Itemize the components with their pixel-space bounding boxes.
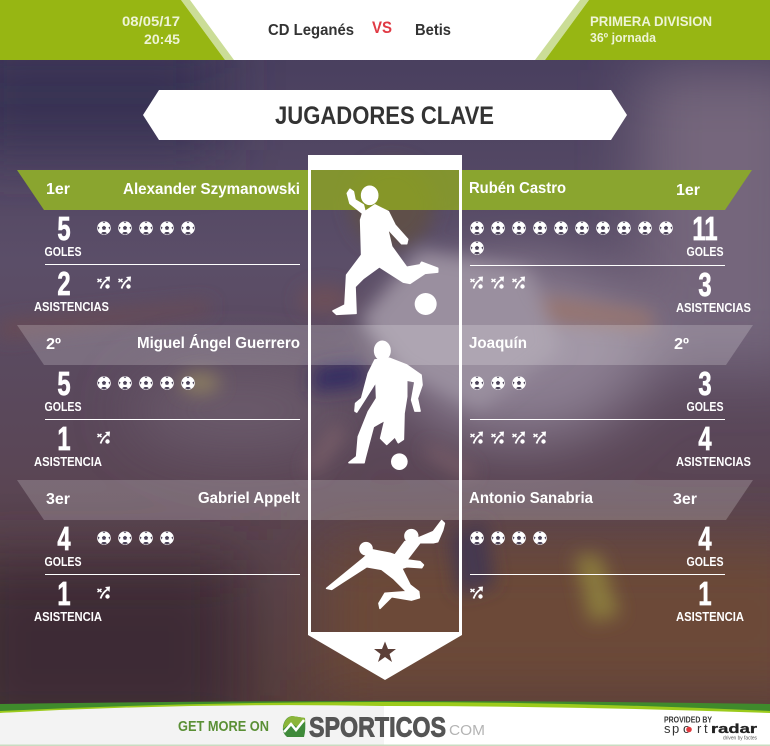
rank band 2: Miguel Ángel Guerrero xyxy=(137,333,300,352)
center frame with star chevron xyxy=(308,155,462,680)
left stats: Guerrero: GOLES xyxy=(44,400,82,414)
footer: sportradar logo: PROVIDED BY xyxy=(664,714,712,724)
footer: sportradar logo: sport xyxy=(664,721,708,736)
left stats: Szymanowski: ASISTENCIAS xyxy=(34,300,109,314)
divider lines xyxy=(45,264,725,574)
footer: white bar xyxy=(0,705,770,746)
header: green date panel: 08/05/17 xyxy=(122,13,180,29)
header: team names: Betis xyxy=(415,22,451,39)
left stats: Appelt: 1 xyxy=(57,576,71,613)
left stats: Guerrero: 5 xyxy=(57,366,71,403)
left stats: Appelt: GOLES xyxy=(44,555,82,569)
rank band 3: 3er xyxy=(46,491,70,508)
left stats: Appelt: 4 xyxy=(57,521,71,558)
rank band 1 xyxy=(17,170,752,210)
icon: kicking player silhouette xyxy=(333,186,438,315)
footer: sportradar logo xyxy=(664,714,757,742)
header: green competition panel: PRIMERA DIVISION xyxy=(590,13,712,29)
footer: sporticos logo: GET MORE ON xyxy=(178,719,269,735)
icon: star xyxy=(374,642,396,662)
left stats: Guerrero xyxy=(34,366,195,469)
left stats: Szymanowski xyxy=(34,211,195,314)
header: white match bar xyxy=(0,0,770,60)
right stats: Joaquín: 3 xyxy=(698,366,712,403)
rank band 1: 1er xyxy=(676,182,700,199)
right stats: Sanabria: 1 xyxy=(698,576,712,613)
header: team names: CD Leganés xyxy=(268,22,354,39)
right stats: Joaquín: 4 xyxy=(698,421,712,458)
rank band 3 xyxy=(17,480,753,520)
rank band 1: Alexander Szymanowski xyxy=(123,181,300,198)
footer: sporticos logo: SPORTICOS xyxy=(309,712,446,742)
right stats: Sanabria xyxy=(470,521,744,624)
rank band 3: 3er xyxy=(673,491,697,508)
header: green date panel: 20:45 xyxy=(144,31,180,47)
icon: overhead kick player silhouette xyxy=(327,521,444,608)
rank band 1: Rubén Castro xyxy=(469,180,566,197)
left stats: Guerrero: 1 xyxy=(57,421,71,458)
right stats: Joaquín: ASISTENCIAS xyxy=(676,455,751,469)
header: team names: VS xyxy=(372,19,392,37)
right stats: Castro xyxy=(470,211,751,315)
right stats: Joaquín: GOLES xyxy=(686,400,724,414)
footer: sportradar logo: radar xyxy=(711,721,757,736)
rank band 2: Joaquín xyxy=(469,335,527,352)
rank band 3: Gabriel Appelt xyxy=(198,490,301,507)
rank band 1: 1er xyxy=(46,181,70,198)
footer: lime highlight xyxy=(0,702,770,714)
header: green competition panel xyxy=(535,0,770,60)
left stats: Szymanowski: GOLES xyxy=(44,245,82,259)
right stats: Joaquín xyxy=(470,366,751,469)
right stats: Sanabria: GOLES xyxy=(686,555,724,569)
right stats: Castro: 3 xyxy=(698,267,712,304)
icon: dribbling player silhouette xyxy=(349,341,422,470)
left stats: Guerrero: ASISTENCIA xyxy=(34,455,102,469)
left stats: Appelt: ASISTENCIA xyxy=(34,610,102,624)
footer: green curved strip xyxy=(0,701,770,714)
left stats: Appelt xyxy=(34,521,174,624)
right stats: Sanabria: 4 xyxy=(698,521,712,558)
rank band 2 xyxy=(17,325,753,365)
left stats: Szymanowski: 5 xyxy=(57,211,71,248)
right stats: Castro: ASISTENCIAS xyxy=(676,301,751,315)
footer: sporticos logo xyxy=(178,712,485,742)
rank band 2: 2º xyxy=(46,336,61,353)
right stats: Castro: 11 xyxy=(692,211,718,248)
header: green competition panel: 36º jornada xyxy=(590,31,657,45)
title banner: JUGADORES CLAVE xyxy=(275,102,494,130)
header: team names xyxy=(268,19,451,39)
footer: sportradar logo: driven by factes xyxy=(723,736,757,742)
rank band 3: Antonio Sanabria xyxy=(469,490,593,507)
right stats: Castro: GOLES xyxy=(686,245,724,259)
right stats: Sanabria: ASISTENCIA xyxy=(676,610,744,624)
rank band 2: 2º xyxy=(674,336,689,353)
header: green date panel xyxy=(0,0,234,60)
title banner xyxy=(143,90,627,140)
footer: sporticos logo: COM xyxy=(449,723,485,739)
left stats: Szymanowski: 2 xyxy=(57,266,71,303)
